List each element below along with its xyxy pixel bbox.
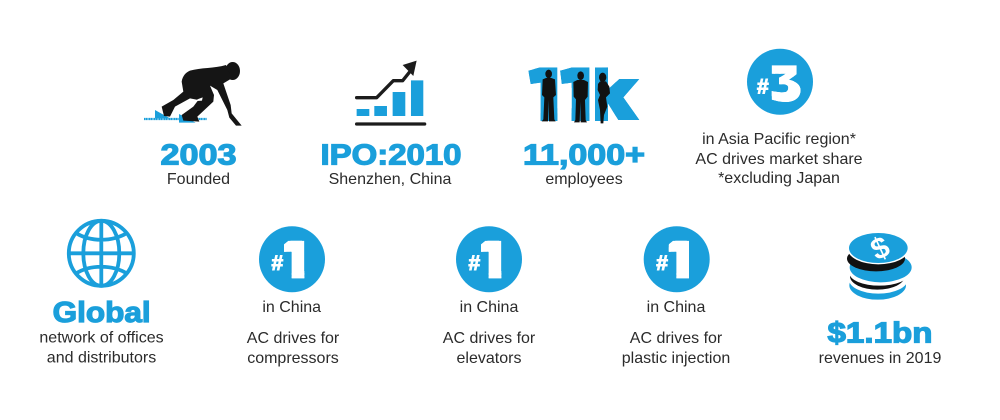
label: employees: employees xyxy=(545,171,623,188)
badge: #1 xyxy=(644,226,710,292)
badge: #3: 3 xyxy=(771,58,797,110)
text: market share xyxy=(695,131,863,187)
text: AC drives for elevators: elevators xyxy=(457,350,521,367)
badge: #1: # xyxy=(272,252,284,275)
badge: #1 xyxy=(259,226,325,292)
icon: sprinter in starting blocks xyxy=(144,62,242,126)
text: network of offices and distributors: network of offices xyxy=(39,330,164,347)
panel: #1 plastic injection xyxy=(622,226,730,367)
text: AC drives for compressors: compressors xyxy=(247,350,339,367)
heading: 2003: 2003 xyxy=(160,140,236,172)
text: AC drives for plastic injection: plastic injection xyxy=(622,350,730,367)
panel: employees xyxy=(524,67,644,188)
label: in China: in China xyxy=(647,299,705,316)
icon: 11k with silhouettes: 11k xyxy=(526,53,642,138)
text: AC drives for plastic injection: AC drives for xyxy=(630,330,723,347)
text: AC drives for compressors: AC drives for xyxy=(247,330,340,347)
heading: Global: Global xyxy=(53,297,151,329)
panel: founded xyxy=(144,62,242,188)
text: AC drives for compressors xyxy=(247,330,340,367)
label: in China: in China xyxy=(262,299,321,316)
badge: #1: # xyxy=(468,252,480,275)
text: market share: *excluding Japan xyxy=(718,170,840,187)
panel: IPO xyxy=(320,61,462,188)
icon: rising bar chart with arrow xyxy=(357,61,425,124)
heading: 11,000+: 11,000+ xyxy=(523,140,645,172)
badge: #3: # xyxy=(757,76,769,98)
badge: #1: 1 xyxy=(477,230,507,290)
text: network of offices and distributors: and distributors xyxy=(47,350,156,367)
icon: coin stack: $ xyxy=(866,230,895,267)
label: Shenzhen, China: Shenzhen, China xyxy=(329,171,451,188)
text: AC drives for elevators xyxy=(443,330,536,367)
text: AC drives for plastic injection xyxy=(622,330,730,367)
heading: $1.1bn: $1.1bn xyxy=(828,318,932,350)
label: revenues in 2019: revenues in 2019 xyxy=(819,350,941,367)
text: AC drives for elevators: AC drives for xyxy=(443,330,536,347)
icon: globe xyxy=(69,221,134,286)
panel: #1 compressors xyxy=(247,226,340,367)
heading: IPO:2010: IPO:2010 xyxy=(320,140,462,172)
badge: #1: 1 xyxy=(665,230,695,290)
text: network of offices and distributors xyxy=(39,330,164,367)
text: market share: in Asia Pacific region* xyxy=(702,131,856,148)
label: in China: in China xyxy=(460,299,518,316)
text: market share: AC drives market share xyxy=(695,151,863,168)
panel: revenues xyxy=(819,230,941,367)
label: Founded: Founded xyxy=(167,171,230,188)
panel: #3 Asia Pacific xyxy=(695,49,863,187)
panel: #1 elevators xyxy=(443,226,536,367)
badge: #1: # xyxy=(656,252,668,275)
badge: #3 xyxy=(747,49,813,115)
badge: #1 xyxy=(456,226,522,292)
panel: global xyxy=(39,221,164,367)
badge: #1: 1 xyxy=(280,230,310,290)
